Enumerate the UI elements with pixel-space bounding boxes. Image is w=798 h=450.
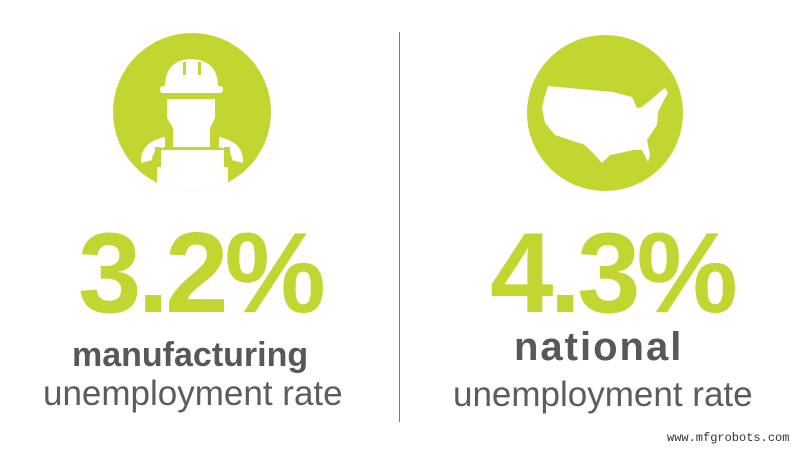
icon: USA map: [527, 35, 683, 191]
stat: 3.2%: 3.2%: [78, 210, 322, 337]
label: national: national: [514, 325, 683, 369]
watermark: www.mfgrobots.com: [667, 431, 789, 445]
divider: [399, 32, 400, 422]
stat: 4.3%: 4.3%: [490, 210, 734, 337]
icon: construction worker: [113, 33, 271, 191]
label: manufacturing: manufacturing: [72, 336, 308, 374]
label: unemployment rate left: unemployment rate: [43, 374, 343, 413]
label: unemployment rate right: unemployment rate: [453, 375, 753, 414]
